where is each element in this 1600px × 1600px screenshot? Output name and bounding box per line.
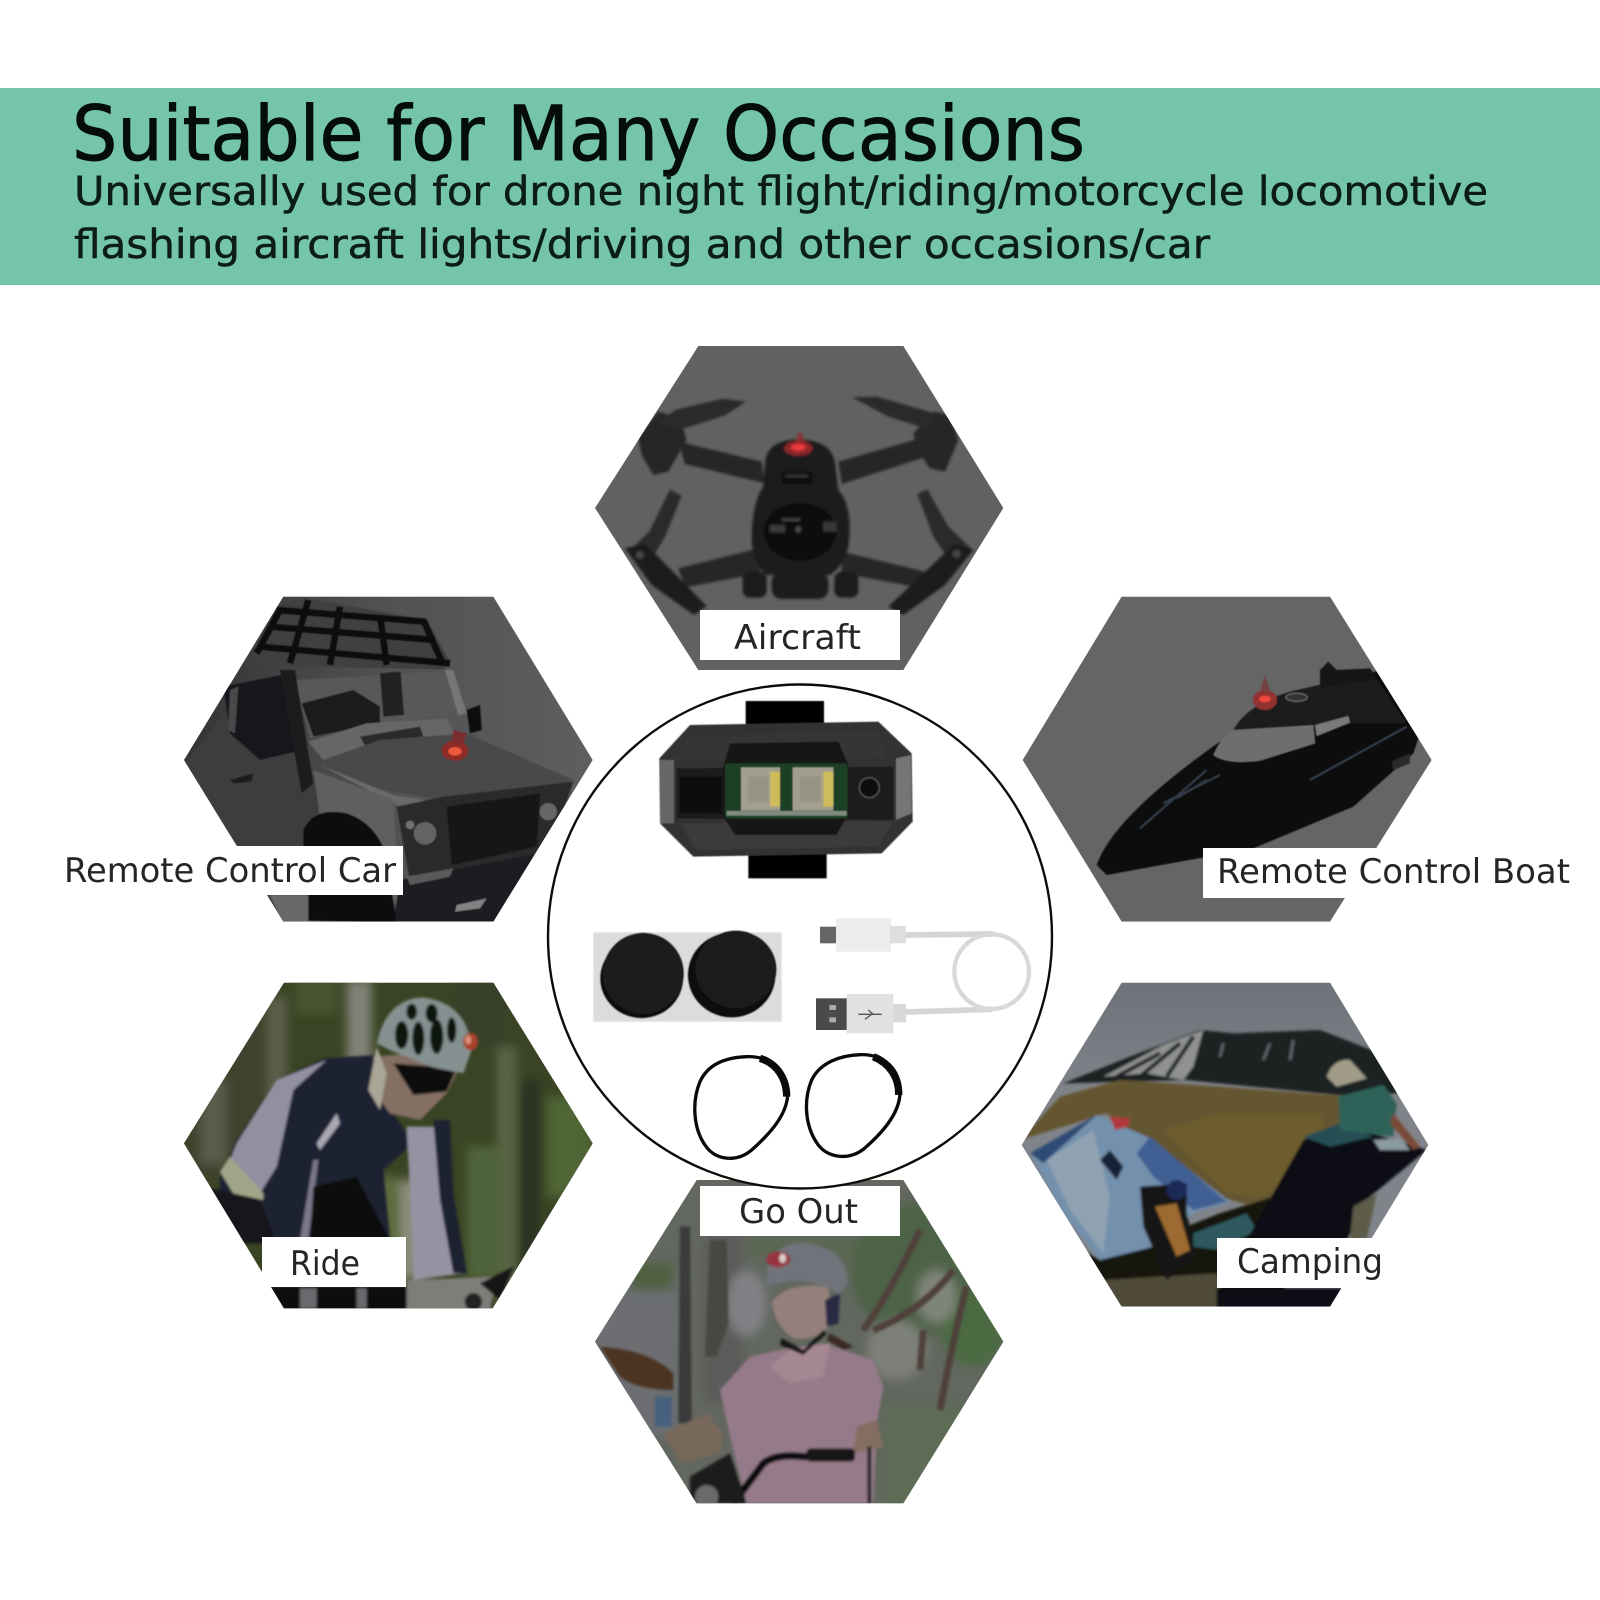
label: Remote Control Boat: Remote Control Boat: [1217, 852, 1570, 892]
banner description: flashing aircraft lights/driving and other occasions/car: [74, 222, 1211, 268]
banner description: Universally used for drone night flight/riding/motorcycle locomotive: [74, 169, 1488, 215]
icon: USB charging cable: [816, 918, 1029, 1033]
label: Camping: [1217, 1238, 1383, 1288]
icon: rubber bands: [695, 1055, 900, 1158]
label: Ride: [262, 1237, 406, 1287]
panel: aircraft: [590, 340, 1010, 680]
label: Aircraft: [700, 610, 900, 660]
panel: camping: [1020, 980, 1440, 1320]
label: Ride: Ride: [290, 1244, 360, 1284]
panel: ride: [180, 980, 600, 1320]
label: Remote Control Car: Remote Control Car: [64, 851, 396, 891]
icon: adhesive velcro pads: [593, 931, 782, 1022]
icon: strobe light device: [659, 701, 913, 878]
banner description: [74, 169, 1488, 268]
central product circle: [548, 684, 1052, 1188]
label: Go Out: Go Out: [739, 1192, 858, 1232]
label: Aircraft: Aircraft: [734, 618, 861, 658]
label: Go Out: [700, 1186, 900, 1236]
panel: go out: [590, 1170, 1010, 1510]
panel: remote control boat: [1020, 590, 1575, 930]
banner: [0, 88, 1600, 285]
label: Camping: Camping: [1237, 1242, 1383, 1282]
panel: remote control car: [60, 590, 600, 930]
banner title: Suitable for Many Occasions: [72, 89, 1085, 178]
